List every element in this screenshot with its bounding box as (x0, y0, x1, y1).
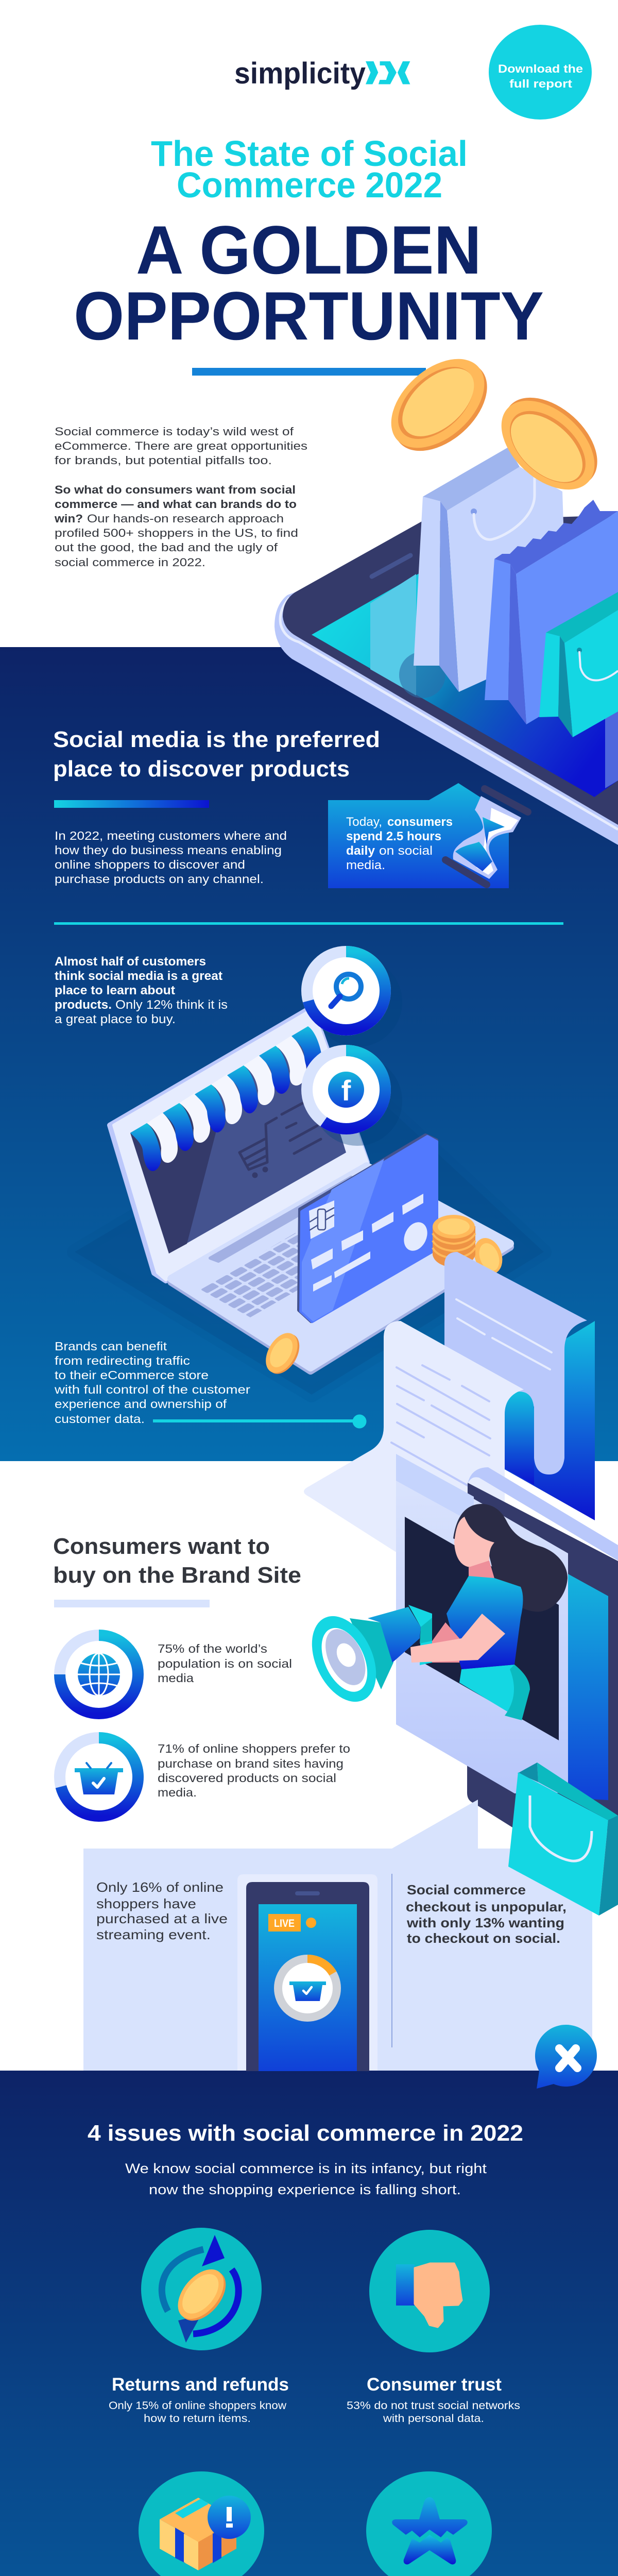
text: brands can benefit: experience and ownership of (55, 1397, 227, 1411)
heading: social media is the preferred place: place to discover products (53, 756, 350, 782)
text: meeting customers: In 2022, meeting customers where and (55, 829, 287, 842)
icon: chat bubble with x (535, 2025, 597, 2089)
intro text: profiled 500+ shoppers in the US, to find (55, 527, 298, 539)
icon: facebook ring: f (341, 1074, 351, 1107)
icon: poor experience broken star (366, 2471, 492, 2576)
text: 71 percent: discovered products on social (158, 1771, 336, 1785)
text: brands can benefit: from redirecting traffic (55, 1354, 190, 1367)
icon: teal shopping bag (539, 592, 618, 737)
icon: facebook ring (307, 1050, 402, 1146)
callout: 2.5 hours daily on social media (328, 783, 528, 888)
text: almost half of customers: a great place to buy. (55, 1012, 176, 1026)
title: The State of Social Commerce 2022: The State of Social (151, 133, 468, 174)
text: meeting customers: purchase products on any channel. (55, 872, 264, 886)
text: returns and refunds: how to return items. (144, 2413, 251, 2425)
intro text: win? (54, 512, 83, 525)
text: almost half of customers: Almost half of customers (55, 955, 206, 969)
intro text: Our hands-on research approach (87, 512, 284, 525)
text: 75 percent: population is on social (158, 1657, 292, 1670)
illustration: receipts and shop window (299, 1252, 618, 1850)
icon: light shopping bag (414, 447, 566, 692)
intro text: eCommerce. There are great opportunities (55, 439, 307, 452)
text: brands can benefit: customer data. (55, 1412, 145, 1426)
title: The State of Social Commerce 2022: Commerce 2022 (177, 165, 442, 205)
text: 71 percent: purchase on brand sites having (158, 1757, 344, 1770)
heading underline bar (54, 1600, 210, 1607)
text: almost half of customers: place to learn about (55, 984, 175, 997)
callout: 2.5 hours daily on social media: daily (346, 844, 375, 858)
text: almost half of customers: think social media is a great (55, 969, 222, 983)
icon: inventory issues box (139, 2471, 264, 2576)
text: only 16 percent: shoppers have (96, 1896, 196, 1911)
callout: 2.5 hours daily on social media: on social (379, 844, 433, 858)
section divider (54, 922, 563, 925)
icon: phone live stream (237, 1874, 377, 2071)
text: returns and refunds: Returns and refunds (112, 2375, 289, 2395)
callout: 2.5 hours daily on social media: Today, (346, 815, 382, 829)
icon: teal shopping bag with handle (508, 1762, 618, 1916)
text: brands can benefit: with full control of the customer (54, 1383, 250, 1396)
text: only 16 percent: streaming event. (96, 1927, 211, 1942)
button: download the full report (489, 25, 592, 120)
text: only 16 percent: Only 16% of online (96, 1879, 224, 1895)
intro text: social commerce in 2022. (55, 556, 205, 569)
icon: small coin (259, 1328, 306, 1379)
text: checkout unpopular: Social commerce (407, 1882, 526, 1897)
text: 75 percent: media (158, 1671, 194, 1685)
icon: returns and refunds (141, 2228, 262, 2350)
icon: phone live stream: LIVE (274, 1918, 295, 1929)
text: brands can benefit: to their eCommerce store (55, 1368, 209, 1382)
icon: coin left (374, 342, 504, 468)
panel: social media section background (0, 647, 618, 1461)
text: meeting customers: how they do business means enabling (55, 843, 282, 857)
text: almost half of customers: Only 12% think it is (115, 998, 228, 1012)
button: download the full report: Download the (498, 62, 583, 75)
text: issues intro: We know social commerce is in its infancy, but right (125, 2161, 487, 2176)
text: meeting customers: online shoppers to discover and (55, 858, 245, 871)
text: only 16 percent: purchased at a live (96, 1911, 228, 1926)
text: consumer trust: Consumer trust (367, 2375, 502, 2395)
button: download the full report: full report (509, 77, 573, 90)
title: The State of Social Commerce 2022 (151, 133, 468, 205)
text: checkout unpopular: checkout is unpopular, (406, 1899, 566, 1914)
text: checkout unpopular: to checkout on social. (407, 1930, 560, 1946)
text: returns and refunds (109, 2375, 289, 2425)
stat: 71 percent ring with basket (60, 1738, 138, 1816)
heading: consumers want to buy on the brand site: buy on the Brand Site (53, 1563, 301, 1588)
connector line with dot (153, 1415, 367, 1428)
text: consumer trust: 53% do not trust social networks (347, 2400, 520, 2412)
text: brands can benefit: Brands can benefit (55, 1340, 167, 1353)
illustration: woman with megaphone (299, 1504, 568, 1720)
callout: 2.5 hours daily on social media: media. (346, 858, 385, 872)
callout: 2.5 hours daily on social media: spend 2.5 hours (346, 829, 441, 843)
logo: simplicityDX: simplicity (234, 57, 366, 90)
text: consumer trust: with personal data. (383, 2413, 484, 2425)
text: issues intro (125, 2161, 487, 2197)
heading: social media is the preferred place: Social media is the preferred (53, 727, 380, 752)
callout: 2.5 hours daily on social media: consumers (387, 815, 453, 829)
illustration shadow: laptop floor (75, 1082, 544, 1395)
panel: shop window (396, 1454, 568, 1793)
text: 71 percent (158, 1742, 350, 1799)
text: brands can benefit (54, 1340, 250, 1426)
illustration: phone with shopping bags and coins (274, 342, 618, 845)
icon: megaphone (299, 1605, 432, 1712)
text: checkout unpopular: with only 13% wanting (406, 1915, 564, 1930)
icon: coin stack (433, 1215, 507, 1278)
heading: consumers want to buy on the brand site: Consumers want to (53, 1534, 270, 1559)
title: A Golden Opportunity: A GOLDEN (136, 212, 482, 289)
text: meeting customers (55, 829, 287, 886)
icon: hourglass (445, 789, 528, 885)
intro text: So what do consumers want from social (55, 483, 296, 496)
title divider bar (192, 368, 426, 376)
panel: 4 issues section background (0, 2071, 618, 2576)
title: A Golden Opportunity (74, 212, 544, 354)
illustration: credit card (299, 1135, 437, 1321)
stat: 75 percent ring with globe (60, 1635, 138, 1714)
panel: live streaming and checkout callout (83, 1800, 592, 2071)
text: returns and refunds: Only 15% of online shoppers know (109, 2400, 287, 2412)
text: checkout unpopular (406, 1882, 566, 1946)
text: 71 percent: media. (158, 1786, 197, 1799)
heading: consumers want to buy on the brand site (53, 1534, 301, 1588)
text: 71 percent: 71% of online shoppers prefer to (158, 1742, 350, 1755)
intro text: for brands, but potential pitfalls too. (55, 454, 272, 467)
text: only 16 percent (96, 1879, 228, 1942)
text: 75 percent (158, 1642, 292, 1685)
text: consumer trust (347, 2375, 520, 2425)
text: 75 percent: 75% of the world’s (158, 1642, 267, 1655)
icon: coin right (485, 380, 614, 507)
text: almost half of customers (55, 955, 228, 1026)
text: almost half of customers: products. (55, 998, 112, 1012)
illustration: laptop storefront (110, 1011, 510, 1370)
title: A Golden Opportunity: OPPORTUNITY (74, 278, 544, 354)
text: issues intro: now the shopping experience is falling short. (149, 2182, 461, 2197)
intro text (54, 425, 307, 569)
heading underline bar (54, 800, 209, 808)
heading: 4 issues with social commerce: 4 issues with social commerce in 2022 (88, 2121, 523, 2146)
icon: search ring (307, 952, 402, 1047)
intro text: commerce — and what can brands do to (55, 498, 297, 511)
intro text: out the good, the bad and the ugly of (55, 541, 278, 554)
intro text: Social commerce is today’s wild west of (55, 425, 294, 438)
navy frame (467, 1483, 618, 1850)
icon: consumer trust thumbs down (369, 2230, 490, 2352)
heading: social media is the preferred place (53, 727, 380, 782)
icon: blue shopping bag (485, 500, 618, 724)
